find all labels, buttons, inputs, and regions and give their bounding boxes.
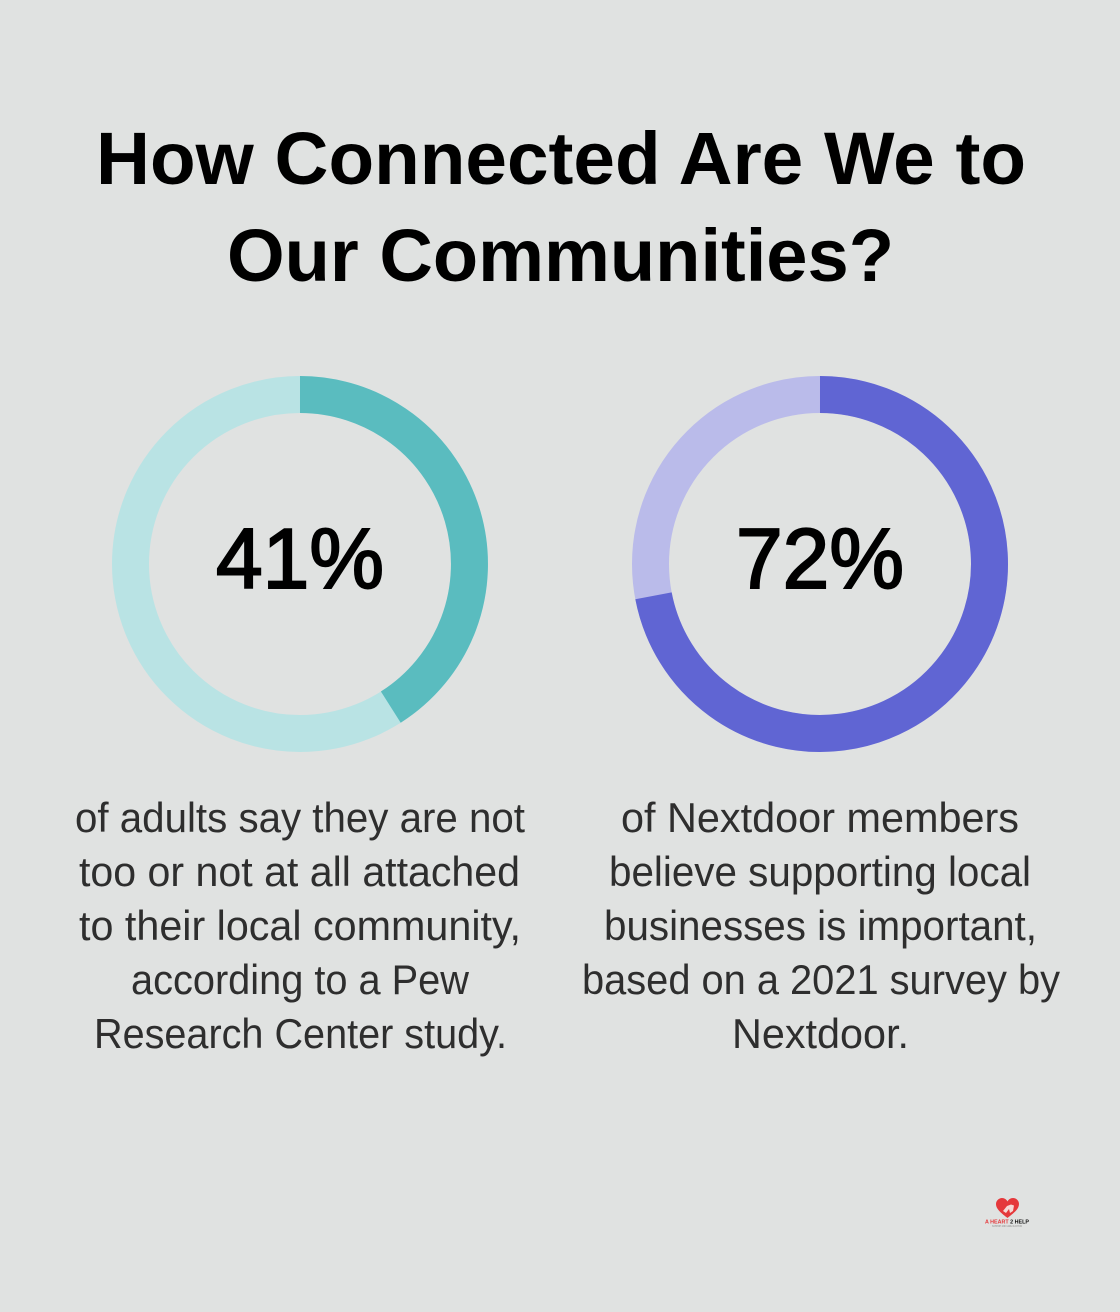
logo wordmark: A HEART 2 HELP [985, 1220, 1029, 1226]
icon: heart [996, 1198, 1019, 1218]
description: 72%: businesses is important, [604, 902, 1037, 949]
description: 41% [75, 794, 525, 1057]
description: 41%: of adults say they are not [75, 794, 525, 841]
title [96, 117, 1026, 297]
description: 72%: of Nextdoor members [621, 794, 1019, 841]
title: Our Communities? [227, 214, 894, 297]
description: 41%: to their local community, [79, 902, 521, 949]
panel: 41% stat [75, 394, 525, 1057]
description: 72%: believe supporting local [609, 848, 1031, 895]
description: 41%: Research Center study. [94, 1010, 507, 1057]
donut chart: 41% [130, 394, 470, 734]
logo tagline: SUPPORT AND CARE IN ACTION [992, 1225, 1022, 1228]
panel: 72% stat [582, 394, 1060, 1057]
description: 72%: based on a 2021 survey by [582, 956, 1060, 1003]
stat value: 41%: 41% [216, 512, 384, 607]
description: 41%: too or not at all attached [79, 848, 520, 895]
description: 72%: Nextdoor. [732, 1010, 909, 1057]
title: How Connected Are We to [96, 117, 1026, 200]
logo: A Heart 2 Help [985, 1198, 1029, 1228]
stat value: 72%: 72% [736, 512, 904, 607]
description: 72% [582, 794, 1060, 1057]
donut chart: 72% [650, 394, 990, 734]
description: 41%: according to a Pew [131, 956, 470, 1003]
